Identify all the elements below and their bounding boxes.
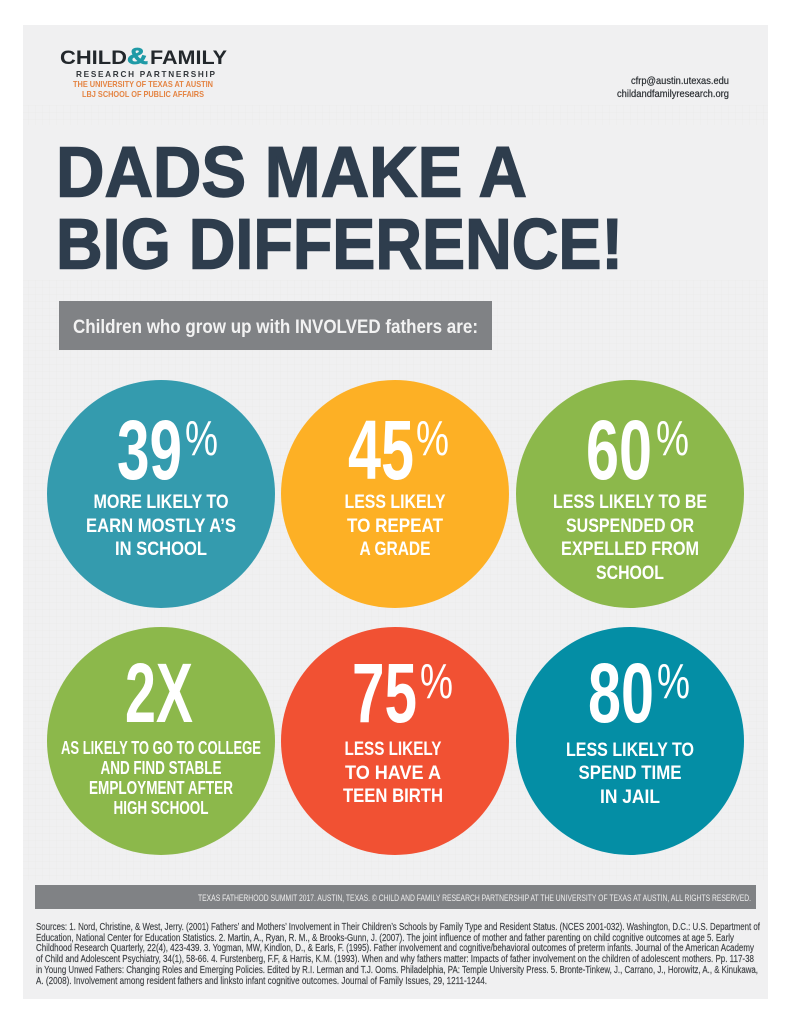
stat circle: 75%: TO HAVE A xyxy=(345,762,441,784)
stat circle: 39%: MORE LIKELY TO xyxy=(94,491,228,513)
stat circle: 60%: EXPELLED FROM xyxy=(561,538,699,560)
footer banner xyxy=(35,885,756,909)
contact details: childandfamilyresearch.org xyxy=(617,89,729,100)
logo: CHILD xyxy=(60,47,127,69)
logo: THE UNIVERSITY OF TEXAS AT AUSTIN xyxy=(73,79,213,89)
stat circle: 2X xyxy=(47,627,275,855)
stat circle: 75%: LESS LIKELY xyxy=(344,738,442,760)
stat circle: 39%: % xyxy=(185,412,218,466)
stat circle: 2X: 2X xyxy=(125,646,193,740)
logo xyxy=(60,43,227,99)
stat circle: 39%: EARN MOSTLY A’S xyxy=(86,515,236,537)
stat circle: 80%: LESS LIKELY TO xyxy=(566,739,694,761)
stat circle: 75%: 75 xyxy=(352,646,417,740)
stat circle: 75%: % xyxy=(420,655,453,709)
stat circle: 80%: SPEND TIME xyxy=(578,762,682,784)
stat circle: 39%: IN SCHOOL xyxy=(115,538,207,560)
stat circle: 39%: 39 xyxy=(117,403,182,497)
subtitle banner: Children who grow up with INVOLVED fathers are: xyxy=(73,317,478,338)
stat circle: 60%: SCHOOL xyxy=(596,562,664,584)
sources xyxy=(36,922,760,987)
logo: LBJ SCHOOL OF PUBLIC AFFAIRS xyxy=(82,89,204,99)
sources: A. (2008). Involvement among resident fathers and linksto infant cognitive outcomes. Journal of Family Issues, 29, 1211-1244. xyxy=(36,976,487,987)
subtitle banner xyxy=(59,301,492,350)
stat circle: 2X: AND FIND STABLE xyxy=(100,758,222,778)
contact details: cfrp@austin.utexas.edu xyxy=(631,76,729,87)
stat circle: 2X: HIGH SCHOOL xyxy=(114,798,208,818)
stat circle: 60%: 60 xyxy=(586,403,652,497)
contact details xyxy=(617,76,729,100)
stat circle: 45% xyxy=(281,380,509,608)
stat circle: 60% xyxy=(516,380,744,608)
stat circle: 45%: 45 xyxy=(348,403,414,497)
stat circle: 2X: EMPLOYMENT AFTER xyxy=(89,778,233,798)
stat circle: 80% xyxy=(516,627,744,855)
stat circle: 75% xyxy=(281,627,509,855)
stat circle: 80%: IN JAIL xyxy=(600,786,660,808)
stat circle: 80%: 80 xyxy=(588,646,654,740)
stat circle: 2X: AS LIKELY TO GO TO COLLEGE xyxy=(61,738,261,758)
stat circle: 39% xyxy=(47,380,275,608)
stat circle: 75%: TEEN BIRTH xyxy=(343,785,443,807)
logo: RESEARCH PARTNERSHIP xyxy=(76,70,216,79)
stat circle: 45%: % xyxy=(416,412,449,466)
stat circle: 45%: TO REPEAT xyxy=(347,515,443,537)
stat circle: 60%: LESS LIKELY TO BE xyxy=(553,491,707,513)
title xyxy=(56,132,623,284)
logo: & xyxy=(127,43,148,69)
stat circle: 80%: % xyxy=(657,655,690,709)
stat circle: 45%: LESS LIKELY xyxy=(344,491,446,513)
logo: FAMILY xyxy=(150,47,227,69)
stat circle: 60%: SUSPENDED OR xyxy=(566,515,694,537)
stat circle: 45%: A GRADE xyxy=(360,538,430,560)
title: BIG DIFFERENCE! xyxy=(56,204,623,284)
stat circle: 60%: % xyxy=(656,412,689,466)
title: DADS MAKE A xyxy=(56,132,527,212)
